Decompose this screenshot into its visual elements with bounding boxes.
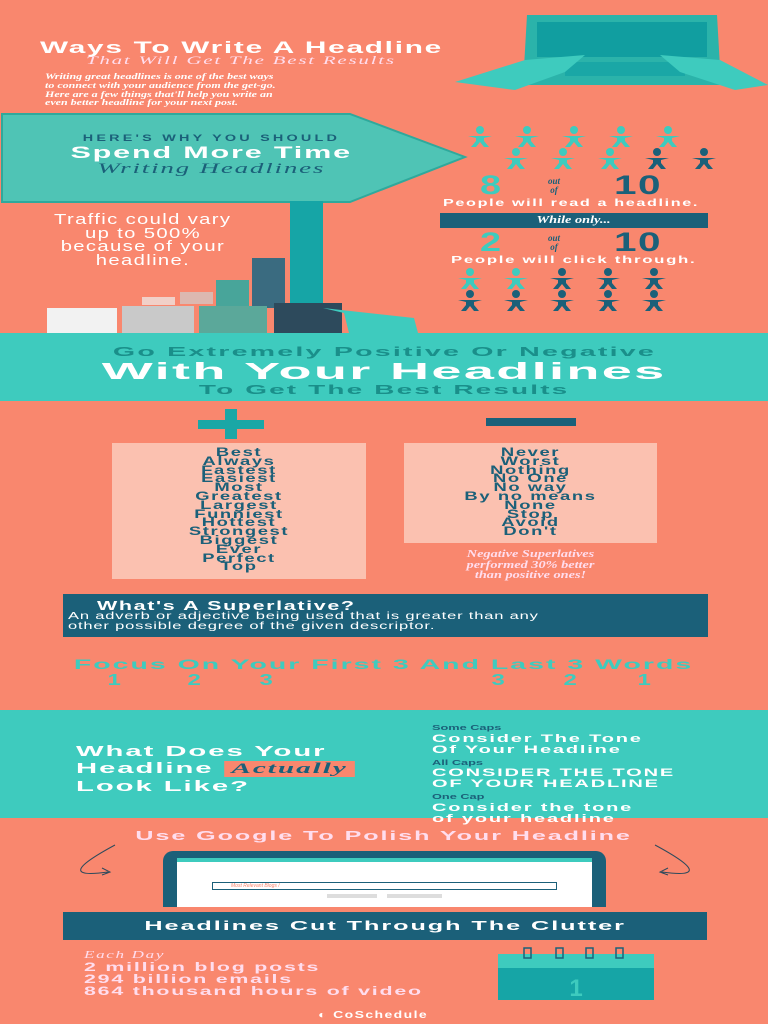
- positive words box: Best: [216, 447, 262, 459]
- daily stats: 294 billion emails: [84, 972, 293, 986]
- negative words box: Never: [501, 447, 560, 459]
- negative words box: Nothing: [490, 465, 571, 477]
- focus heading: Focus On Your First 3 And Last 3 Words: [74, 656, 694, 672]
- positive words box: Most: [214, 482, 264, 494]
- text: out: [548, 176, 560, 186]
- google laptop: [163, 851, 606, 907]
- banner text: Spend More Time: [70, 143, 352, 162]
- banner arrow: [1, 113, 468, 203]
- daily stats: Each Day: [84, 950, 165, 961]
- text: People will read a headline.: [443, 198, 699, 209]
- title: Ways To Write A Headline: [40, 38, 443, 57]
- icon: people 8 of 10: [468, 126, 716, 169]
- while only bar: While only...: [537, 214, 611, 226]
- arrows: [80, 844, 690, 876]
- section: what does your headline look like: Consider the tone: [432, 802, 633, 814]
- traffic text: up to 500%: [85, 224, 200, 242]
- superlative definition box: [63, 594, 708, 637]
- superlative definition box: What's A Superlative?: [97, 598, 356, 613]
- word numbers: 3: [260, 672, 274, 689]
- intro text: to connect with your audience from the get-go.: [45, 81, 276, 90]
- section: what does your headline look like: Look Like?: [76, 778, 250, 795]
- text: out: [548, 233, 560, 243]
- daily stats: [84, 950, 423, 998]
- icon: calendar: 1: [569, 975, 583, 1002]
- section: what does your headline look like: CONSIDER THE TONE: [432, 767, 675, 779]
- word numbers: [108, 672, 652, 689]
- word numbers: 2: [564, 672, 578, 689]
- negative words box: Avoid: [501, 517, 560, 529]
- section band: positive or negative: Go Extremely Positive Or Negative: [112, 344, 656, 359]
- negative note: Negative Superlatives: [467, 548, 594, 560]
- positive words box: Fastest: [201, 465, 277, 477]
- bar chart: [47, 201, 418, 333]
- negative words box: Worst: [501, 456, 560, 468]
- text: of: [550, 185, 558, 195]
- superlative definition box: An adverb or adjective being used that is greater than any: [68, 611, 539, 622]
- banner text: HERE'S WHY YOU SHOULD: [82, 133, 340, 143]
- positive words box: Always: [202, 456, 276, 468]
- while only bar: [440, 213, 708, 228]
- positive words box: Hottest: [202, 517, 276, 529]
- negative words box: Stop: [507, 509, 554, 521]
- positive words box: Ever: [216, 544, 262, 556]
- stat: 2 out of 10: 2: [480, 227, 502, 257]
- google laptop: Most Relevant Blogs /: [231, 883, 280, 889]
- positive words box: Funniest: [194, 509, 284, 521]
- negative note: performed 30% better: [467, 558, 594, 570]
- traffic text: [54, 211, 231, 268]
- section band: positive or negative: With Your Headlines: [102, 358, 666, 384]
- icon: calendar: [498, 947, 654, 1002]
- positive words box: Perfect: [202, 553, 276, 565]
- section: what does your headline look like: All Caps: [432, 760, 483, 766]
- banner text: [70, 133, 352, 177]
- positive words box: Greatest: [195, 491, 283, 503]
- section: what does your headline look like: Consider The Tone: [432, 732, 643, 744]
- negative words box: [404, 443, 657, 543]
- logo: ◐ CoSchedule: [318, 1010, 428, 1021]
- positive words box: Easiest: [201, 473, 277, 485]
- intro text: Here are a few things that'll help you write an: [45, 90, 273, 99]
- text: of your headline: [432, 812, 616, 824]
- clutter heading bar: Headlines Cut Through The Clutter: [144, 918, 626, 933]
- section: what does your headline look like: One Cap: [432, 794, 484, 801]
- icon: minus: [486, 418, 576, 426]
- word numbers: 3: [492, 672, 506, 689]
- positive words box: Top: [220, 561, 258, 573]
- text: 10: [614, 227, 662, 257]
- section: what does your headline look like: [0, 710, 768, 818]
- negative note: than positive ones!: [475, 569, 586, 581]
- icon: laptop with hands: [455, 15, 768, 90]
- section: what does your headline look like: Of Your Headline: [432, 744, 622, 756]
- clutter heading bar: [63, 912, 707, 940]
- positive words box: Largest: [200, 500, 278, 512]
- positive words box: Biggest: [200, 535, 278, 547]
- positive words box: Strongest: [189, 526, 289, 538]
- section band: positive or negative: To Get The Best Results: [199, 382, 569, 397]
- word numbers: 1: [108, 672, 122, 689]
- word numbers: 1: [638, 672, 652, 689]
- negative words box: No way: [493, 482, 568, 494]
- daily stats: 2 million blog posts: [84, 960, 320, 974]
- section: what does your headline look like: What Does Your: [76, 743, 327, 760]
- intro text: even better headline for your next post.: [45, 98, 238, 107]
- subtitle: That Will Get The Best Results: [86, 53, 396, 67]
- negative note: [466, 548, 594, 581]
- traffic text: headline.: [95, 252, 190, 268]
- intro text: [44, 72, 276, 107]
- negative words box: Don't: [503, 526, 558, 538]
- icon: people 2 of 10: [458, 268, 666, 311]
- text: of: [550, 242, 558, 252]
- traffic text: because of your: [60, 238, 225, 255]
- stat: 8 out of 10: 8: [480, 170, 502, 200]
- text: People will click through.: [451, 255, 696, 266]
- positive words box: [112, 443, 366, 579]
- negative words box: None: [504, 500, 557, 512]
- superlative definition box: other possible degree of the given descriptor.: [68, 621, 435, 632]
- negative words box: By no means: [464, 491, 597, 503]
- google heading: Use Google To Polish Your Headline: [136, 828, 632, 843]
- section band: positive or negative: [0, 333, 768, 401]
- section: what does your headline look like: Headline Actually: [76, 760, 348, 777]
- word numbers: 2: [188, 672, 202, 689]
- text: 10: [614, 170, 662, 200]
- section: what does your headline look like: Some Caps: [432, 725, 501, 732]
- negative words box: No One: [493, 473, 568, 485]
- daily stats: 864 thousand hours of video: [84, 984, 423, 998]
- icon: plus: [198, 409, 264, 439]
- traffic text: Traffic could vary: [54, 211, 231, 228]
- section: what does your headline look like: OF YOUR HEADLINE: [432, 778, 660, 790]
- intro text: Writing great headlines is one of the best ways: [45, 72, 273, 81]
- banner text: Writing Headlines: [97, 161, 325, 177]
